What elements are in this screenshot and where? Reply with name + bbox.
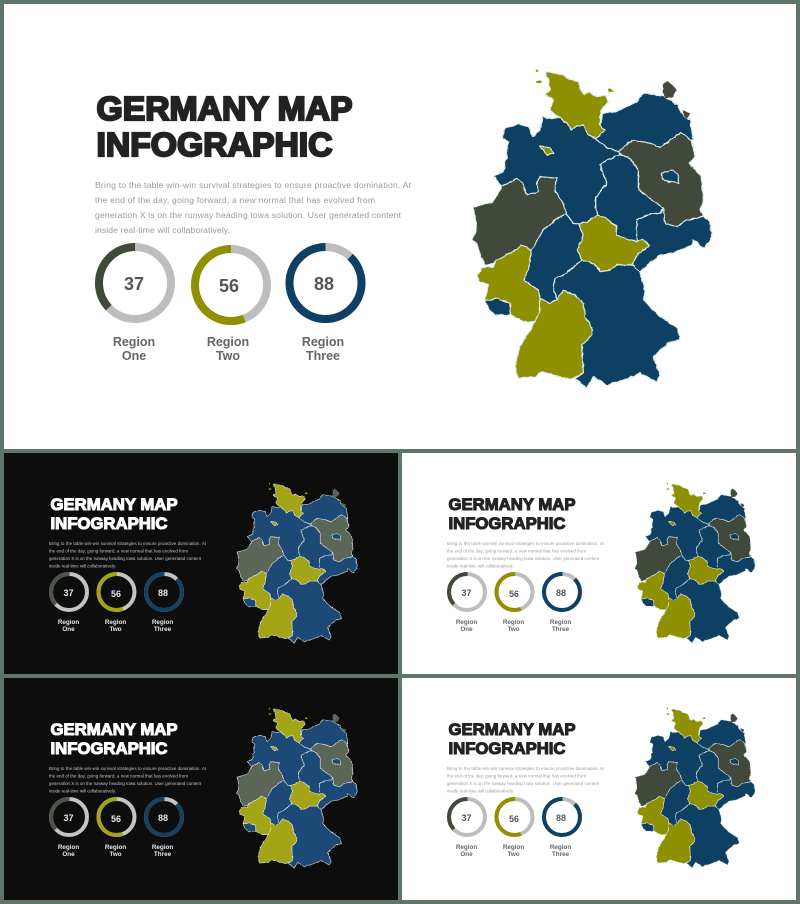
description text: Bring to the table win-win survival strategies to ensure proactive domination. At [447, 541, 605, 546]
ring chart: region two: Two [507, 851, 520, 858]
ring chart: region one: Region [113, 335, 155, 349]
ring chart: region three: Region [152, 844, 173, 851]
description text: inside real-time will collaboratively. [49, 564, 116, 568]
title: GERMANY MAP [448, 495, 576, 514]
ring chart: region three [290, 247, 362, 363]
ring chart: region two [98, 574, 134, 633]
ring chart: region two: Two [109, 851, 122, 858]
description text: inside real-time will collaboratively. [447, 564, 514, 568]
description text: the end of the day, going forward, a new normal that has evolved from [95, 195, 375, 205]
ring chart: region three: 88 [556, 813, 566, 823]
ring chart: region two: Two [507, 626, 520, 633]
ring chart: region two: 56 [509, 589, 519, 599]
description text: Bring to the table win-win survival strategies to ensure proactive domination. At [49, 766, 207, 771]
title [448, 720, 576, 758]
description text: generation X is on the runway heading towa solution. User generated content [49, 781, 202, 786]
map of Germany [634, 708, 755, 868]
ring chart: region three: Three [154, 626, 172, 633]
ring chart: region two: Region [105, 844, 126, 851]
ring chart: region two [98, 799, 134, 858]
map of Germany [472, 69, 712, 388]
title: INFOGRAPHIC [448, 514, 566, 533]
ring chart: region two: Region [105, 619, 126, 626]
ring chart: region two: 56 [219, 276, 239, 296]
description text: inside real-time will collaboratively. [95, 225, 230, 235]
ring chart: region one: 37 [461, 588, 472, 598]
ring chart: region three: 88 [158, 813, 168, 823]
ring chart: region two [496, 574, 532, 633]
ring chart: region one: One [460, 851, 473, 858]
ring chart: region two: Two [216, 349, 240, 363]
title: INFOGRAPHIC [50, 739, 168, 758]
description text: the end of the day, going forward, a new normal that has evolved from [49, 548, 188, 554]
ring chart: region one: 37 [63, 588, 74, 598]
title: GERMANY MAP [50, 720, 178, 739]
title: GERMANY MAP [50, 495, 178, 514]
title: INFOGRAPHIC [448, 739, 566, 758]
ring chart: region three: Three [552, 851, 570, 858]
title [50, 720, 178, 758]
ring chart: region two: Region [207, 335, 249, 349]
title: GERMANY MAP [96, 91, 352, 128]
title: INFOGRAPHIC [50, 514, 168, 533]
ring chart: region one: One [460, 626, 473, 633]
ring chart: region one: One [62, 851, 75, 858]
ring chart: region one [449, 799, 485, 858]
panel: dark slide top [4, 453, 398, 674]
description text [49, 541, 207, 568]
description text: the end of the day, going forward, a new normal that has evolved from [49, 774, 188, 778]
description text: generation X is on the runway heading towa solution. User generated content [49, 556, 202, 561]
ring chart: region one: One [62, 626, 75, 633]
ring chart: region one: Region [456, 844, 477, 851]
ring chart: region three: 88 [556, 588, 566, 598]
map of Germany [634, 483, 755, 643]
description text [447, 541, 605, 568]
ring chart: region two: 56 [509, 814, 519, 824]
ring chart: region one: 37 [124, 274, 144, 294]
ring chart: region three: Three [306, 349, 340, 363]
ring chart: region three: 88 [314, 274, 334, 294]
ring chart: region one: Region [58, 619, 79, 626]
description text: Bring to the table win-win survival strategies to ensure proactive domination. At [447, 766, 605, 771]
description text [95, 180, 412, 235]
ring chart: region one [51, 574, 87, 633]
panel: light slide top [402, 453, 796, 674]
ring chart: region three [544, 574, 580, 633]
ring chart: region two [496, 799, 532, 858]
ring chart: region two: Region [503, 844, 524, 851]
description text: inside real-time will collaboratively. [447, 788, 514, 794]
ring chart: region two: 56 [111, 589, 121, 599]
description text: inside real-time will collaboratively. [49, 788, 116, 794]
ring chart: region two [195, 249, 267, 363]
ring chart: region one: One [122, 349, 146, 363]
ring chart: region three: Three [552, 626, 570, 633]
ring chart: region one [99, 247, 171, 363]
description text: generation X is on the runway heading towa solution. User generated content [95, 210, 402, 220]
ring chart: region three: Three [154, 851, 172, 858]
ring chart: region three: Region [550, 844, 571, 851]
ring chart: region two: Region [503, 619, 524, 626]
ring chart: region three: Region [550, 619, 571, 626]
ring chart: region three: Region [152, 619, 173, 626]
ring chart: region one: Region [58, 844, 79, 851]
ring chart: region three [146, 574, 182, 633]
ring chart: region one: Region [456, 619, 477, 626]
description text [49, 766, 207, 794]
title [50, 495, 178, 533]
description text: generation X is on the runway heading towa solution. User generated content [447, 556, 600, 561]
description text: the end of the day, going forward, a new normal that has evolved from [447, 774, 586, 778]
description text: Bring to the table win-win survival strategies to ensure proactive domination. At [49, 541, 207, 546]
ring chart: region three: 88 [158, 588, 168, 598]
ring chart: region one [51, 799, 87, 858]
ring chart: region one: 37 [63, 813, 74, 823]
title: INFOGRAPHIC [96, 127, 332, 164]
ring chart: region one [449, 574, 485, 633]
title: GERMANY MAP [448, 720, 576, 739]
title [96, 91, 352, 164]
description text: Bring to the table win-win survival strategies to ensure proactive domination. At [95, 180, 412, 190]
panel: light slide bottom [402, 678, 796, 900]
panel: main slide [4, 4, 796, 449]
description text: generation X is on the runway heading towa solution. User generated content [447, 781, 600, 786]
panel: dark slide bottom [4, 678, 398, 900]
map of Germany [236, 708, 357, 868]
ring chart: region three [544, 799, 580, 858]
description text: the end of the day, going forward, a new normal that has evolved from [447, 548, 586, 554]
ring chart: region one: 37 [461, 813, 472, 823]
ring chart: region two: Two [109, 626, 122, 633]
map of Germany [236, 483, 357, 643]
ring chart: region three [146, 799, 182, 858]
description text [447, 766, 605, 794]
ring chart: region two: 56 [111, 814, 121, 824]
title [448, 495, 576, 533]
ring chart: region three: Region [302, 335, 344, 349]
